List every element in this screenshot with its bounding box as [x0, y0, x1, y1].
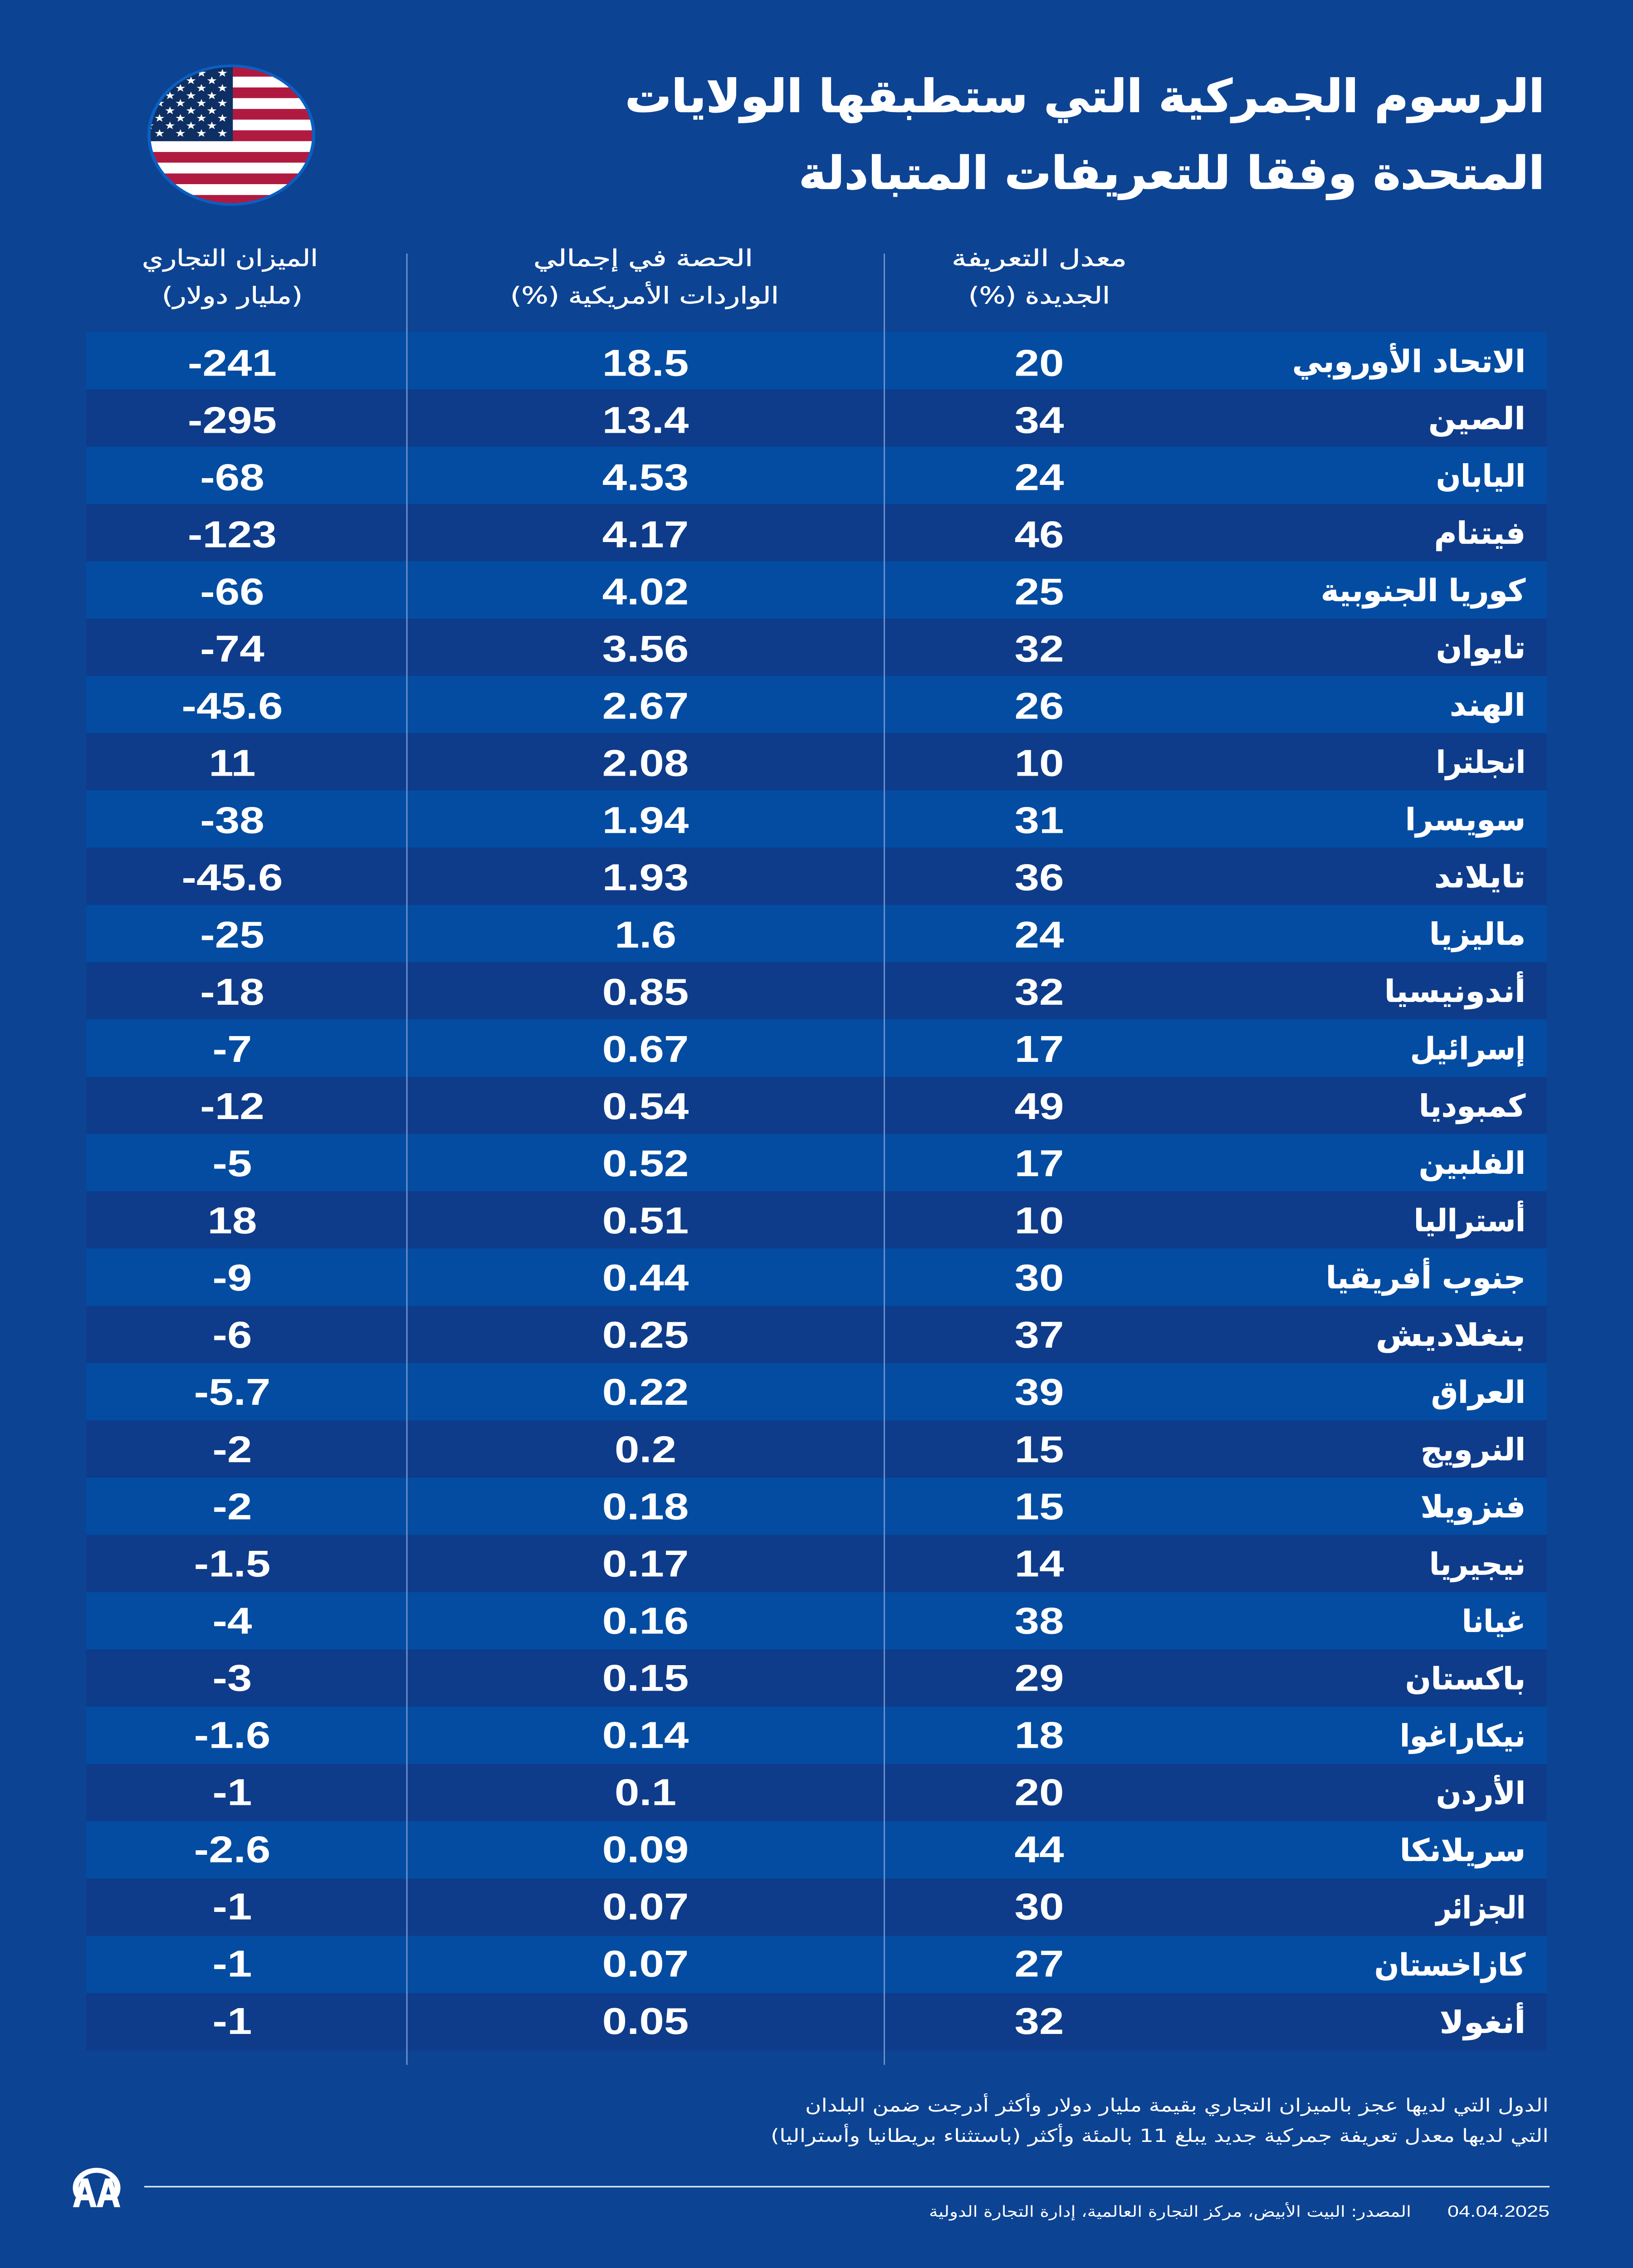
- row: Israel: 17: [1015, 1028, 1064, 1070]
- row: England: انجلترا: [1436, 745, 1525, 780]
- row: Nigeria: -1.5: [194, 1543, 270, 1585]
- table rows: [86, 332, 1547, 2050]
- row: Israel: [86, 1019, 1547, 1077]
- row: Vietnam: فيتنام: [1434, 516, 1525, 551]
- row: Philippines: [86, 1134, 1547, 1191]
- row: Malaysia: [86, 905, 1547, 962]
- row: European Union: -241: [188, 342, 277, 384]
- row: Iraq: 0.22: [602, 1371, 689, 1413]
- row: South Africa: جنوب أفريقيا: [1326, 1258, 1525, 1296]
- row: England: [86, 733, 1547, 790]
- row: South Korea: -66: [200, 571, 264, 613]
- row: Kazakhstan: 27: [1015, 1943, 1064, 1985]
- row: Bangladesh: 0.25: [602, 1314, 689, 1356]
- row: Venezuela: فنزويلا: [1421, 1489, 1525, 1525]
- row: India: 2.67: [602, 685, 689, 727]
- row: Iraq: 39: [1015, 1371, 1064, 1413]
- row: South Korea: كوريا الجنوبية: [1321, 573, 1525, 609]
- row: Malaysia: -25: [200, 914, 264, 956]
- row: Angola: -1: [212, 2000, 252, 2042]
- icon: AA logo: [73, 2170, 120, 2215]
- footnote: [771, 2093, 1549, 2146]
- row: Thailand: [86, 848, 1547, 905]
- row: Malaysia: ماليزيا: [1429, 917, 1525, 952]
- row: England: 10: [1015, 743, 1064, 784]
- row: China: الصين: [1428, 401, 1525, 437]
- row: Nigeria: 14: [1015, 1543, 1064, 1585]
- date: 04.04.2025: [1447, 2203, 1550, 2220]
- row: Algeria: -1: [212, 1886, 252, 1928]
- row: Pakistan: باكستان: [1405, 1661, 1525, 1696]
- row: Norway: النرويج: [1421, 1432, 1525, 1468]
- row: Cambodia: كمبوديا: [1419, 1088, 1525, 1124]
- row: South Korea: [86, 561, 1547, 619]
- column header: share of US imports: الحصة في إجمالي: [533, 245, 753, 272]
- title: المتحدة وفقا للتعريفات المتبادلة: [799, 147, 1545, 200]
- column header: tariff rate: معدل التعريفة: [952, 245, 1127, 272]
- row: Kazakhstan: 0.07: [602, 1943, 689, 1985]
- title: [625, 70, 1545, 200]
- row: Thailand: 36: [1015, 857, 1064, 899]
- column header: share of US imports: الواردات الأمريكية (%): [510, 282, 779, 309]
- row: Philippines: 0.52: [602, 1143, 689, 1184]
- row: Pakistan: 0.15: [602, 1657, 689, 1699]
- column header: trade balance: (مليار دولار): [162, 283, 303, 309]
- row: China: 34: [1015, 400, 1064, 441]
- row: Indonesia: [86, 962, 1547, 1019]
- row: Taiwan: 32: [1015, 628, 1064, 670]
- icon: AA logo: AA: [73, 2171, 120, 2215]
- row: China: [86, 390, 1547, 447]
- row: India: [86, 676, 1547, 733]
- row: Taiwan: -74: [200, 628, 264, 670]
- row: Algeria: 0.07: [602, 1886, 689, 1928]
- row: Iraq: -5.7: [194, 1371, 270, 1413]
- row: Norway: -2: [212, 1429, 252, 1470]
- row: Indonesia: 0.85: [602, 971, 689, 1013]
- row: Nicaragua: 18: [1015, 1715, 1064, 1756]
- row: Switzerland: 1.94: [602, 800, 689, 841]
- row: Iraq: [86, 1363, 1547, 1420]
- row: Philippines: -5: [212, 1143, 252, 1184]
- row: Jordan: 0.1: [615, 1772, 676, 1813]
- row: India: الهند: [1450, 688, 1525, 723]
- row: India: 26: [1015, 685, 1064, 727]
- row: Vietnam: 46: [1015, 514, 1064, 556]
- column header: share of US imports: [510, 245, 779, 309]
- row: South Africa: [86, 1249, 1547, 1306]
- row: Nigeria: [86, 1535, 1547, 1592]
- row: Australia: 0.51: [602, 1200, 689, 1242]
- row: Thailand: -45.6: [181, 857, 283, 899]
- row: Guyana: [86, 1592, 1547, 1649]
- row: Algeria: [86, 1878, 1547, 1936]
- row: Sri Lanka: [86, 1821, 1547, 1878]
- row: Philippines: 17: [1015, 1143, 1064, 1184]
- row: Israel: 0.67: [602, 1028, 689, 1070]
- row: Japan: [86, 447, 1547, 504]
- row: South Korea: 25: [1015, 571, 1064, 613]
- row: Switzerland: 31: [1015, 800, 1064, 841]
- row: Sri Lanka: 0.09: [602, 1829, 689, 1871]
- row: Thailand: 1.93: [602, 857, 689, 899]
- footnote: التي لديها معدل تعريفة جمركية جديد يبلغ 11 بالمئة وأكثر (باستثناء بريطانيا وأستراليا): [771, 2123, 1549, 2146]
- row: Vietnam: 4.17: [602, 514, 689, 556]
- row: Philippines: الفلبين: [1419, 1146, 1525, 1181]
- row: Indonesia: 32: [1015, 971, 1064, 1013]
- row: Australia: 18: [208, 1200, 257, 1242]
- row: Cambodia: 0.54: [602, 1085, 689, 1127]
- row: Algeria: الجزائر: [1435, 1890, 1525, 1926]
- row: Japan: 4.53: [602, 457, 689, 499]
- row: Bangladesh: 37: [1015, 1314, 1064, 1356]
- row: Israel: إسرائيل: [1410, 1031, 1525, 1066]
- row: European Union: 20: [1015, 342, 1064, 384]
- row: Kazakhstan: -1: [212, 1943, 252, 1985]
- row: Guyana: 38: [1015, 1600, 1064, 1642]
- row: Sri Lanka: سريلانكا: [1400, 1833, 1525, 1868]
- row: Pakistan: 29: [1015, 1657, 1064, 1699]
- row: Taiwan: 3.56: [602, 628, 689, 670]
- row: Switzerland: -38: [200, 800, 264, 841]
- row: Malaysia: 1.6: [615, 914, 676, 956]
- row: Japan: اليابان: [1436, 458, 1525, 494]
- row: Venezuela: 15: [1015, 1486, 1064, 1528]
- row: Australia: 10: [1015, 1200, 1064, 1242]
- row: Vietnam: [86, 504, 1547, 561]
- row: Indonesia: -18: [200, 971, 264, 1013]
- row: Jordan: -1: [212, 1772, 252, 1813]
- row: Venezuela: 0.18: [602, 1486, 689, 1528]
- row: Australia: أستراليا: [1414, 1200, 1525, 1238]
- row: Nicaragua: [86, 1707, 1547, 1764]
- row: Jordan: [86, 1764, 1547, 1821]
- row: Malaysia: 24: [1015, 914, 1064, 956]
- row: Iraq: العراق: [1431, 1375, 1525, 1410]
- row: Switzerland: سويسرا: [1405, 802, 1525, 838]
- row: Kazakhstan: كازاخستان: [1374, 1947, 1525, 1983]
- column header: tariff rate: [952, 245, 1127, 309]
- row: Nigeria: 0.17: [602, 1543, 689, 1585]
- row: China: -295: [188, 400, 277, 441]
- row: Nicaragua: -1.6: [194, 1715, 270, 1756]
- row: Taiwan: [86, 619, 1547, 676]
- row: Guyana: -4: [212, 1600, 252, 1642]
- row: England: 2.08: [602, 743, 689, 784]
- row: Japan: 24: [1015, 457, 1064, 499]
- row: China: 13.4: [602, 400, 689, 441]
- row: Australia: [86, 1191, 1547, 1249]
- row: Bangladesh: [86, 1306, 1547, 1363]
- footnote: الدول التي لديها عجز بالميزان التجاري بقيمة مليار دولار وأكثر أدرجت ضمن البلدان: [805, 2093, 1549, 2116]
- row: European Union: [86, 332, 1547, 390]
- column header: trade balance: [142, 245, 318, 309]
- row: England: 11: [209, 743, 256, 784]
- row: Nicaragua: 0.14: [602, 1715, 689, 1756]
- row: Sri Lanka: 44: [1015, 1829, 1064, 1871]
- row: Kazakhstan: [86, 1936, 1547, 1993]
- row: Cambodia: 49: [1015, 1085, 1064, 1127]
- row: Jordan: 20: [1015, 1772, 1064, 1813]
- row: India: -45.6: [181, 685, 283, 727]
- row: Israel: -7: [212, 1028, 252, 1070]
- row: Pakistan: [86, 1649, 1547, 1707]
- row: South Africa: -9: [212, 1257, 252, 1299]
- row: Taiwan: تايوان: [1436, 630, 1525, 666]
- row: South Africa: 30: [1015, 1257, 1064, 1299]
- column header: trade balance: الميزان التجاري: [142, 245, 318, 272]
- row: European Union: الاتحاد الأوروبي: [1292, 343, 1525, 380]
- row: Nicaragua: نيكاراغوا: [1400, 1718, 1525, 1754]
- row: South Korea: 4.02: [602, 571, 689, 613]
- column header: tariff rate: الجديدة (%): [968, 283, 1110, 309]
- row: Cambodia: [86, 1077, 1547, 1134]
- row: Bangladesh: -6: [212, 1314, 252, 1356]
- row: Pakistan: -3: [212, 1657, 252, 1699]
- row: Cambodia: -12: [200, 1085, 264, 1127]
- row: European Union: 18.5: [602, 342, 689, 384]
- row: Angola: [86, 1993, 1547, 2050]
- row: Jordan: الأردن: [1436, 1775, 1525, 1811]
- row: Angola: 0.05: [602, 2000, 689, 2042]
- source line: المصدر: البيت الأبيض، مركز التجارة العالمية، إدارة التجارة الدولية: [929, 2202, 1411, 2220]
- row: Guyana: غيانا: [1462, 1604, 1525, 1639]
- row: Norway: [86, 1420, 1547, 1478]
- row: Angola: 32: [1015, 2000, 1064, 2042]
- row: Indonesia: أندونيسيا: [1384, 971, 1525, 1010]
- row: Venezuela: [86, 1478, 1547, 1535]
- row: Switzerland: [86, 790, 1547, 848]
- row: Guyana: 0.16: [602, 1600, 689, 1642]
- row: Thailand: تايلاند: [1434, 859, 1525, 895]
- row: Norway: 15: [1015, 1429, 1064, 1470]
- row: Norway: 0.2: [615, 1429, 676, 1470]
- icon: US flag circle: [144, 63, 318, 208]
- row: Japan: -68: [200, 457, 264, 499]
- row: Nigeria: نيجيريا: [1429, 1546, 1525, 1582]
- row: Vietnam: -123: [188, 514, 277, 556]
- row: South Africa: 0.44: [602, 1257, 689, 1299]
- row: Venezuela: -2: [212, 1486, 252, 1528]
- row: Sri Lanka: -2.6: [194, 1829, 270, 1871]
- row: Algeria: 30: [1015, 1886, 1064, 1928]
- row: Angola: أنغولا: [1440, 2002, 1525, 2041]
- row: Bangladesh: بنغلاديش: [1376, 1317, 1525, 1353]
